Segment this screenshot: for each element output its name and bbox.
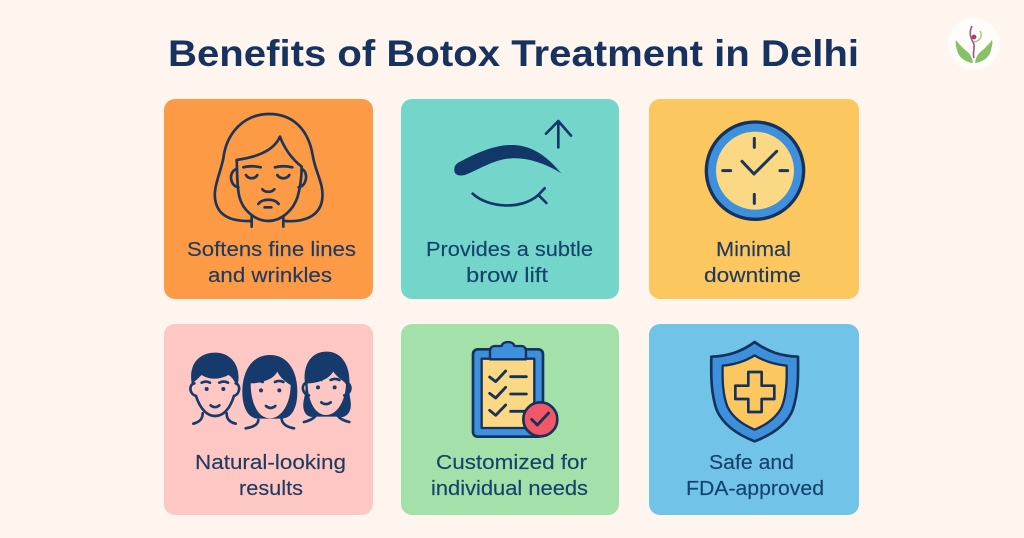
icon: woman's face — [215, 114, 323, 227]
panel: minimal downtime — [649, 99, 859, 299]
label — [195, 451, 346, 500]
title: Benefits of Botox Treatment in Delhi — [168, 33, 859, 74]
panel: customized — [401, 324, 619, 515]
label: Natural-looking — [195, 451, 346, 474]
label — [686, 451, 824, 500]
label: brow lift — [466, 264, 548, 287]
label: Minimal — [716, 238, 791, 261]
panel: brow lift — [401, 99, 619, 299]
icon: clock — [705, 120, 805, 221]
icon: clipboard with check badge — [473, 342, 557, 437]
panel: natural-looking results — [164, 324, 373, 515]
logo — [948, 18, 1000, 70]
label: and wrinkles — [208, 264, 332, 287]
label — [704, 238, 801, 287]
icon: shield with cross — [711, 342, 798, 441]
label — [426, 238, 593, 287]
label: Customized for — [436, 451, 587, 474]
label: Softens fine lines — [187, 238, 356, 261]
label: downtime — [704, 264, 801, 287]
face one — [190, 353, 239, 424]
face three — [303, 352, 351, 422]
label — [431, 451, 588, 500]
label: individual needs — [431, 477, 588, 500]
panel: fine lines — [164, 99, 373, 299]
icon: eyebrow and eye with arrow — [454, 121, 571, 205]
icon: three faces — [190, 352, 351, 428]
label: Safe and — [709, 451, 794, 474]
label: Provides a subtle — [426, 238, 593, 261]
label — [187, 238, 356, 287]
panel: safe and FDA-approved — [649, 324, 859, 515]
face two — [242, 355, 297, 428]
label: results — [239, 477, 303, 500]
label: FDA-approved — [686, 477, 824, 500]
